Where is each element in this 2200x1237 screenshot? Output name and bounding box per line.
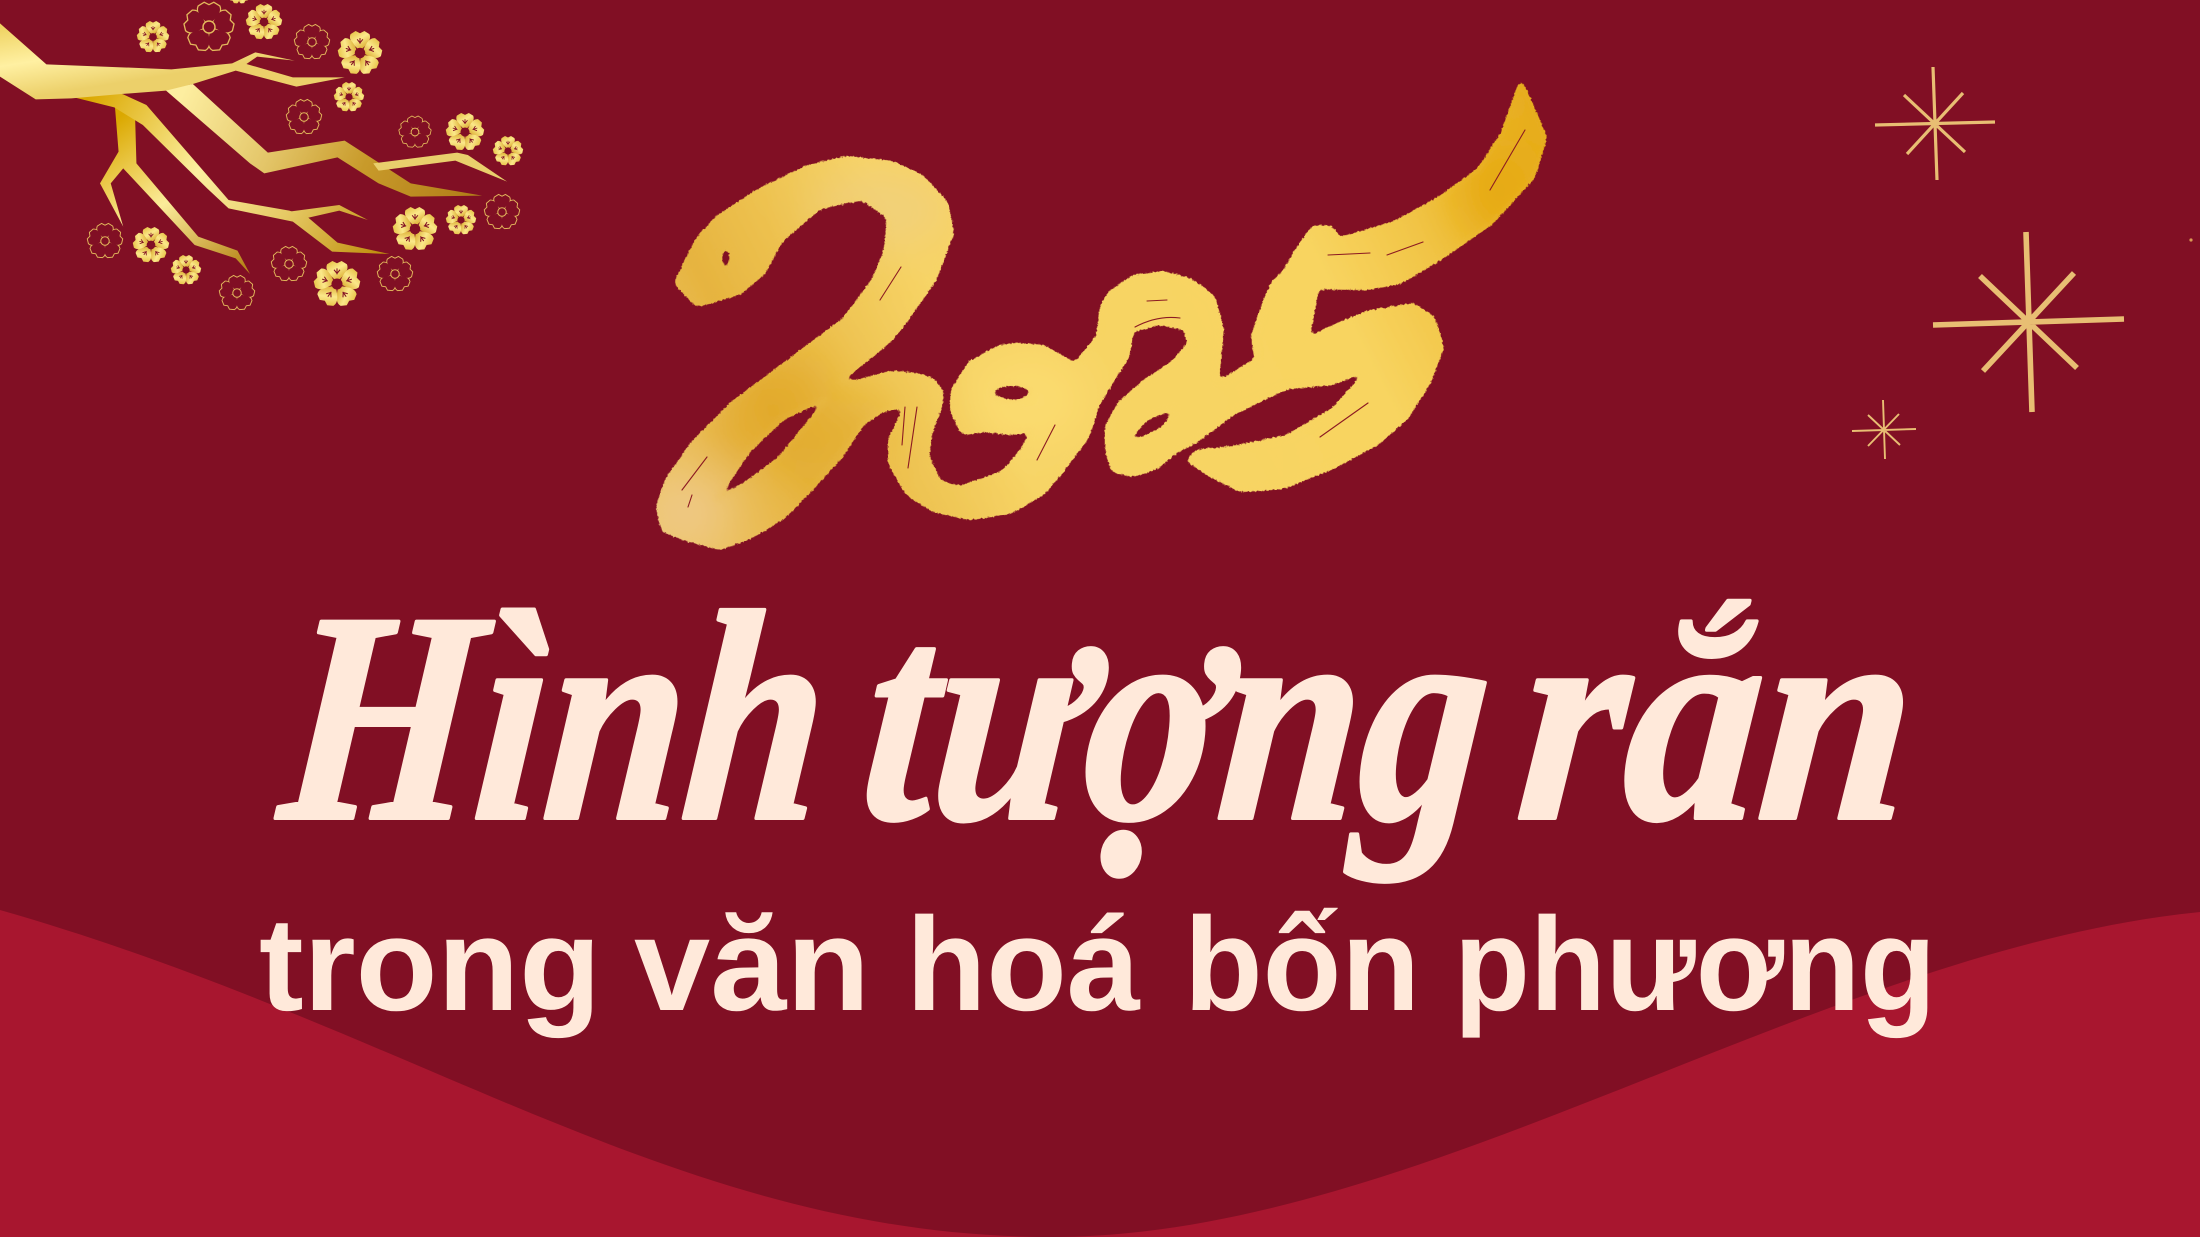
title word: tượng: tượng xyxy=(852,552,1503,884)
sparkle stars xyxy=(1852,67,2193,459)
outlined blossoms xyxy=(86,3,521,311)
star: tiny speck xyxy=(2189,238,2193,242)
subtitle xyxy=(259,891,1936,1039)
gold tone variations xyxy=(650,135,1545,545)
snake body xyxy=(650,82,1545,548)
title word: Hình: Hình xyxy=(267,552,840,884)
subtitle word: hoá: hoá xyxy=(906,891,1141,1039)
2025 gold brush snake xyxy=(650,82,1545,548)
title xyxy=(267,552,1928,884)
subtitle word: phương: phương xyxy=(1454,891,1936,1039)
star: large xyxy=(1933,232,2124,412)
filled gold blossoms xyxy=(131,0,524,309)
subtitle word: văn: văn xyxy=(634,891,870,1039)
golden blossom branch xyxy=(0,0,524,311)
branch limbs xyxy=(0,23,507,274)
star: top xyxy=(1875,67,1995,180)
star: small xyxy=(1852,400,1916,459)
subtitle word: trong: trong xyxy=(259,891,601,1039)
dry brush streaks xyxy=(682,130,1525,507)
title word: rắn: rắn xyxy=(1508,552,1928,884)
subtitle word: bốn: bốn xyxy=(1184,891,1420,1039)
bottom wave xyxy=(0,910,2200,1237)
